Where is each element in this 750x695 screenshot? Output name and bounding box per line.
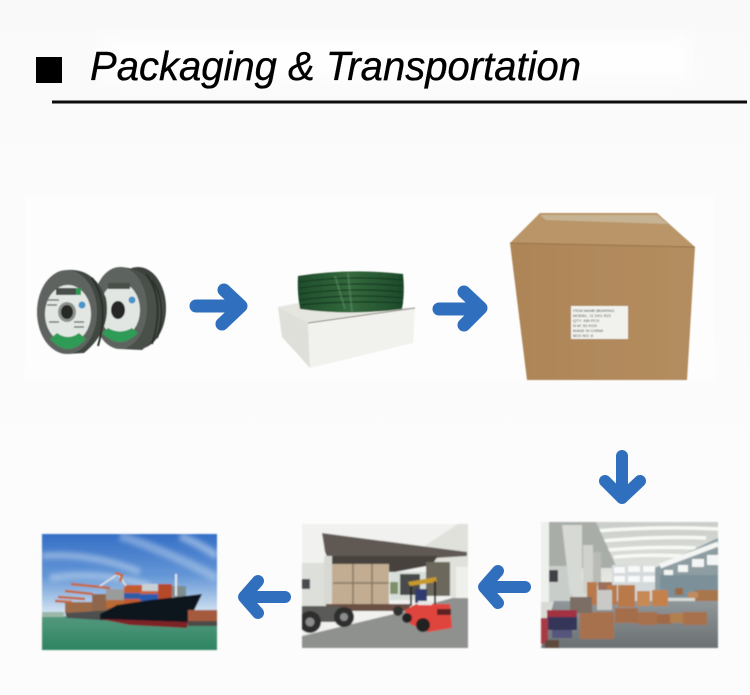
shipping label: ITEM NAME:BEARING: [573, 308, 614, 313]
title: Packaging & Transportation: [90, 43, 581, 89]
right wall windows: [655, 538, 718, 598]
icon: title bullet square: [36, 57, 62, 83]
title underline: [52, 100, 747, 104]
containers: [65, 584, 186, 614]
arrow: truck to ship: [244, 581, 285, 613]
shipping label: MADE IN CHINA: [573, 328, 604, 333]
shipping label: N.W: 52 KGS: [573, 323, 597, 328]
image: two wrapped grinding discs: [37, 267, 166, 354]
arrow: discs to boxed coil: [196, 290, 241, 324]
ship hull: [65, 610, 113, 620]
arrow: warehouse to truck: [484, 571, 525, 603]
shipping label: BOX NO: 8: [573, 333, 594, 338]
shipping label: [571, 306, 628, 339]
arrow: carton to warehouse: [605, 456, 640, 498]
cranes: [55, 573, 126, 602]
panel: product packaging row background: [25, 195, 715, 380]
image: green disc stack on white box: [278, 271, 415, 368]
pallet stacks: [580, 582, 718, 639]
left wall and columns: [541, 566, 573, 602]
far wall windows: [612, 565, 657, 599]
shipping label: MODEL: 11 DK1 R22: [573, 313, 612, 318]
photo: container ship: [42, 534, 217, 650]
shipping label: QTY: 490 PCS: [573, 318, 600, 323]
photo: truck loading with forklift: [299, 524, 468, 648]
forklift: [402, 577, 452, 632]
heading: bullet and title: [36, 43, 581, 89]
arrow: boxed coil to carton: [439, 292, 481, 325]
image: cardboard carton: [510, 213, 695, 380]
panel: title background: [100, 36, 690, 80]
photo: warehouse: [541, 522, 718, 648]
